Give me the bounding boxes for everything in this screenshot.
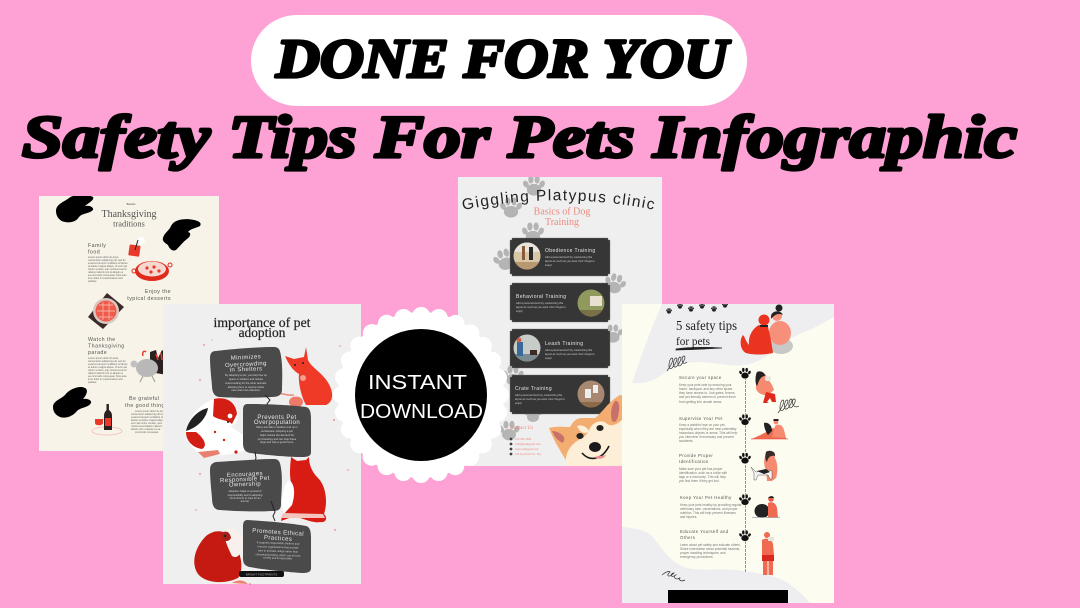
- card: leash training: Leash Training: [545, 341, 583, 347]
- step 3: tags or a microchip. This will help: [679, 475, 726, 479]
- card: crate training: Add a personal touch by customizing this: [515, 393, 563, 397]
- section: family food: irure dolor in reprehenderit velit: [88, 277, 123, 280]
- heading: Barcelo: [127, 202, 136, 206]
- section: family food: ullamco laboris nisi ut aliquip ex: [88, 271, 124, 274]
- illustration: red cat: [266, 347, 332, 408]
- step 3: identification, such as a collar with: [679, 471, 727, 475]
- step 5: Educate Yourself and: [680, 529, 729, 534]
- step 4: Keep your pets healthy by providing regular: [680, 503, 742, 507]
- step 1: they have access to. Use gates, fences,: [679, 391, 735, 395]
- card: minimizes overcrowding: In Shelters: [229, 366, 263, 374]
- footer pill: BRIGHT FOOTPRINTS: [246, 572, 277, 576]
- step 1: Secure your space: [679, 375, 722, 380]
- connector arrow: [265, 395, 271, 411]
- heading: importance of pet: [214, 315, 311, 330]
- step 5: [680, 529, 741, 559]
- card: leash training: Add a personal touch by customizing this: [545, 348, 593, 352]
- heading: Thanksgiving: [102, 209, 156, 220]
- heading: 5 safety tips: [676, 318, 737, 333]
- card: promotes ethical practices: care to animals. Adopt rather than: [258, 548, 299, 554]
- section: parade: consectetur adipiscing elit, sed do: [88, 360, 126, 363]
- section: family food: ea commodo consequat. Duis aute: [88, 274, 127, 277]
- section: be grateful: enim ad minim veniam, quis: [131, 422, 163, 425]
- step 1: and pet-friendly barriers to prevent them: [679, 395, 736, 399]
- badge: instant download: INSTANT: [368, 372, 467, 394]
- card: prevents pet overpopulation: [243, 404, 311, 457]
- step 2: [679, 416, 738, 443]
- panel: giggling platypus clinic: [458, 177, 662, 466]
- section: desserts: [127, 289, 171, 302]
- step 2: hazardous objects or areas. This will help: [679, 431, 738, 435]
- squiggle: [778, 399, 799, 413]
- card: promotes ethical practices: [243, 520, 311, 573]
- panel: thanksgiving traditions: [39, 195, 219, 451]
- card: prevents pet overpopulation: pet breeding and can help these: [258, 437, 297, 441]
- badge: instant download: DOWNLOAD: [360, 401, 483, 423]
- paw prints: [490, 175, 629, 440]
- badge: done for you: [251, 15, 747, 106]
- illustration: woman hugging dog: [741, 304, 793, 354]
- step 4: [680, 495, 742, 519]
- card: promotes ethical practices: It supports responsible shelters and: [257, 540, 300, 546]
- card: behavioral training: [510, 283, 610, 322]
- section: parade: Thanksgiving: [88, 344, 125, 350]
- card: leash training: enjoy!: [545, 356, 552, 360]
- card: prevents pet overpopulation: helps reduce the demand for: [260, 433, 294, 437]
- step 3: Identification: [679, 459, 709, 464]
- footer bar: [668, 590, 788, 603]
- step 1: Keep your pets safe by securing your: [679, 383, 733, 387]
- timeline: [745, 378, 746, 572]
- card: prevents pet overpopulation: Overpopulation: [254, 420, 300, 426]
- card: encourages responsible pet ownership: Adoption helps to spread of: [229, 489, 262, 493]
- step 2: Supervise Your Pet: [679, 416, 723, 421]
- step 5: Others: [680, 535, 695, 540]
- step 2: you intervene if necessary and prevent: [679, 435, 734, 439]
- step 5: proper handling techniques, and: [680, 551, 726, 555]
- section: desserts: typical desserts: [127, 296, 171, 302]
- section: family food: consectetur adipiscing elit, sed do: [88, 259, 126, 262]
- section: be grateful: commodo consequat: [135, 431, 159, 434]
- contact block: [510, 425, 542, 456]
- card: crate training: layout as much as you want. Don't forget to: [515, 397, 565, 401]
- section: parade: pariatur.: [88, 381, 97, 384]
- step 3: you find them if they get lost.: [679, 479, 720, 483]
- step 3: Provide Proper: [679, 453, 713, 458]
- card: encourages responsible pet ownership: Responsible Pet: [220, 476, 270, 484]
- card: encourages responsible pet ownership: Encourages: [227, 471, 263, 479]
- section: parade: Lorem ipsum dolor sit amet,: [88, 357, 119, 360]
- card: promotes ethical practices: Promotes Ethical: [252, 528, 304, 538]
- section: family food: Family: [88, 243, 106, 249]
- section: family food: minim veniam, quis nostrud exercit: [88, 268, 127, 271]
- figure 4: [752, 496, 780, 518]
- icon: dessert tray: [88, 293, 124, 329]
- step 3: Make sure your pet has proper: [679, 467, 723, 471]
- panel: 5 safety tips for pets: [622, 302, 834, 603]
- card: encourages responsible pet ownership: [210, 459, 282, 511]
- card: minimizes overcrowding: space in shelters and reduce: [229, 377, 264, 381]
- timeline paws: [738, 368, 752, 541]
- card: leash training: layout as much as you want. Don't forget to: [545, 352, 595, 356]
- card: crate training: [510, 375, 610, 414]
- card: minimizes overcrowding: Overcrowding: [225, 361, 267, 369]
- squiggle: [662, 571, 685, 581]
- subtitle: Basics of Dog: [534, 206, 590, 218]
- section: parade: Watch the: [88, 337, 116, 343]
- step 4: nutrition. This will help prevent illnesses: [680, 511, 736, 515]
- illustration: spaniel: [194, 528, 248, 584]
- card: prevents pet overpopulation: Many animals in shelters end up in: [256, 425, 298, 429]
- figure 3: [751, 451, 777, 481]
- card: behavioral training: enjoy!: [516, 309, 523, 313]
- section: family food: eiusmod tempor incididunt ut labore: [88, 262, 128, 265]
- card: minimizes overcrowding: care and more attention.: [231, 388, 261, 392]
- section: family food: pariatur.: [88, 280, 97, 283]
- section: parade: irure dolor in reprehenderit velit: [88, 378, 123, 381]
- blob: bottom left: [53, 387, 91, 418]
- title: Safety Tips For Pets Infographic: [22, 104, 1017, 170]
- step 5: emergency procedures.: [680, 555, 714, 559]
- step 5: Learn about pet safety and educate others.: [680, 543, 741, 547]
- connector arrow: [271, 501, 275, 521]
- section: parade: et dolore magna aliqua. Ut enim ad: [88, 366, 128, 369]
- badge: instant download: [338, 312, 504, 478]
- card: obedience training: [510, 238, 610, 276]
- heading: [214, 315, 311, 340]
- step 4: Keep Your Pet Healthy: [680, 495, 732, 500]
- section: parade: ullamco laboris nisi ut aliquip ex: [88, 372, 124, 375]
- figure 2: [751, 419, 788, 439]
- card: minimizes overcrowding: allowing them to receive better: [228, 385, 264, 389]
- heading: traditions: [113, 220, 145, 228]
- blob: top left: [56, 195, 93, 222]
- section: family food: Lorem ipsum dolor sit amet,: [88, 256, 119, 259]
- card: obedience training: Add a personal touch by customizing this: [545, 255, 593, 259]
- card: obedience training: enjoy!: [545, 263, 552, 267]
- card: minimizes overcrowding: [210, 347, 282, 398]
- card: obedience training: Obedience Training: [545, 248, 596, 254]
- section: parade: parade: [88, 350, 107, 356]
- section: family food: food: [88, 250, 100, 256]
- step 4: and injuries.: [680, 515, 697, 519]
- section: parade: ea commodo consequat. Duis aute: [88, 375, 127, 378]
- section: be grateful: labore et dolore magna aliqua: [131, 419, 165, 422]
- card: prevents pet overpopulation: euthanasia. Adopting a pet: [261, 429, 293, 433]
- card: prevents pet overpopulation: Prevents Pet: [257, 415, 297, 421]
- clinic name: Giggling Platypus clinic: [462, 189, 654, 210]
- contact block: 123 Anywhere St., City: [515, 452, 542, 456]
- step 1: home, backyard, and any other space: [679, 387, 733, 391]
- squiggle: [667, 356, 687, 371]
- top paw row: [666, 304, 728, 314]
- illustration: spotted dog: [186, 398, 249, 458]
- card: behavioral training: Behavioral Training: [516, 294, 566, 300]
- card: crate training: Crate Training: [515, 386, 552, 392]
- blob: top right: [163, 219, 201, 251]
- paint splashes: [195, 340, 349, 585]
- step 1: [679, 375, 736, 404]
- card: behavioral training: layout as much as you want. Don't forget to: [516, 305, 566, 309]
- section: parade: eiusmod tempor incididunt ut labore: [88, 363, 128, 366]
- contact block: 123-456-7890: [515, 437, 532, 441]
- card: behavioral training: Add a personal touch by customizing this: [516, 301, 564, 305]
- panel: importance of pet adoption: [163, 304, 361, 585]
- card: prevents pet overpopulation: dogs and cats a good home.: [260, 440, 294, 444]
- section: desserts: Enjoy the: [145, 289, 171, 295]
- illustration: sitting cat: [281, 457, 326, 522]
- card: encourages responsible pet ownership: responsibility and to adopting: [228, 493, 263, 497]
- card: minimizes overcrowding: overcrowding for the other animals,: [225, 381, 267, 385]
- section: be grateful: eiusmod tempor incididunt ut: [131, 416, 163, 419]
- contact block: Contact Us: [510, 425, 533, 431]
- section: family food: et dolore magna aliqua. Ut enim ad: [88, 265, 128, 268]
- figure 1: [756, 371, 776, 403]
- section: family food: [88, 243, 128, 283]
- heading: for pets: [676, 334, 710, 348]
- step 5: Share information about potential hazards,: [680, 547, 740, 551]
- section: be grateful: Lorem ipsum dolor sit amet: [135, 410, 165, 413]
- step 2: accidents.: [679, 439, 693, 443]
- illustration: corgi: [549, 395, 624, 467]
- step 1: from getting into unsafe areas.: [679, 400, 722, 404]
- section: be grateful: [125, 396, 163, 434]
- step 2: especially when they are near potentially: [679, 427, 737, 431]
- section: parade: minim veniam, quis nostrud exercit: [88, 369, 127, 372]
- card: encourages responsible pet ownership: Ownership: [229, 481, 261, 489]
- subtitle: [534, 206, 590, 228]
- contact block: hello@reallygreat.com: [515, 442, 541, 446]
- icon: turkey: [130, 350, 167, 382]
- card: encourages responsible pet ownership: animal.: [241, 499, 250, 503]
- connector arrow: [254, 452, 256, 464]
- heading: [102, 203, 156, 226]
- icon: cup: [128, 237, 145, 257]
- card: encourages responsible pet ownership: commitment to care for an: [229, 496, 261, 500]
- heading: adoption: [239, 325, 286, 340]
- card: minimizes overcrowding: Minimizes: [231, 354, 261, 362]
- icon: pan: [132, 261, 172, 281]
- card: crate training: enjoy!: [515, 401, 522, 405]
- step 2: Keep a watchful eye on your pet,: [679, 423, 726, 427]
- section: be grateful: Be grateful: [129, 396, 160, 402]
- card: leash training: [510, 329, 610, 368]
- card: promotes ethical practices: choosing breeding, which can be less: [256, 552, 301, 558]
- icon: bottle: [92, 404, 122, 435]
- footer pill: [239, 571, 284, 577]
- heading: [676, 318, 737, 350]
- section: be grateful: consectetur adipiscing elit sed: [131, 413, 165, 416]
- section: be grateful: the good things: [125, 403, 168, 409]
- badge: done for you: DONE FOR YOU: [275, 28, 732, 89]
- contact block: www.reallygreat.com: [515, 447, 539, 451]
- section: be grateful: nostrud exercitation ullamco: [131, 425, 163, 428]
- card: obedience training: layout as much as you want. Don't forget to: [545, 259, 595, 263]
- step 3: [679, 453, 727, 483]
- section: be grateful: laboris nisi ut aliquip ex ea: [131, 428, 161, 431]
- background shapes: [632, 304, 834, 383]
- section: parade: [88, 337, 128, 384]
- card: minimizes overcrowding: By adopting a pet, you help free up: [225, 373, 267, 377]
- step 4: veterinary care, vaccinations, and proper: [680, 507, 739, 511]
- card: promotes ethical practices: cruelty and irresponsible.: [263, 555, 293, 561]
- subtitle: Training: [545, 217, 579, 228]
- figure 5: [762, 532, 774, 575]
- card: promotes ethical practices: Practices: [264, 535, 292, 543]
- card: promotes ethical practices: rescues organizations that provide: [258, 544, 299, 550]
